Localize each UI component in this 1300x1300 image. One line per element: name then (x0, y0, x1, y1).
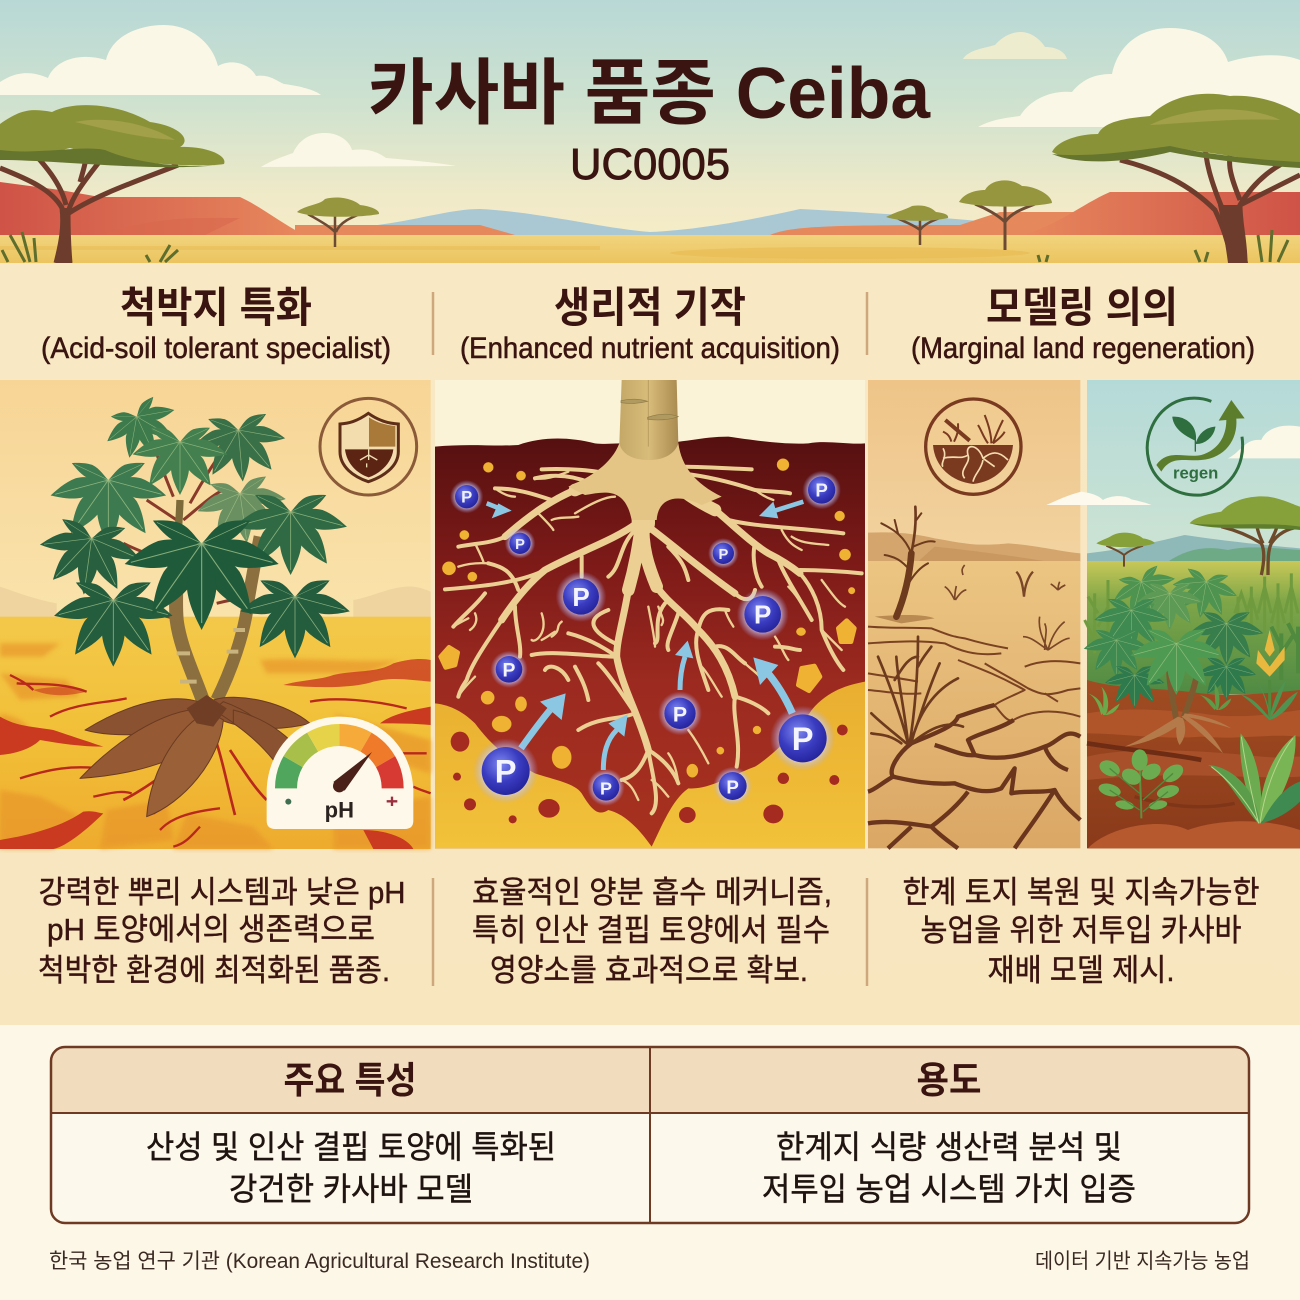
table cell: traits: 산성 및 인산 결핍 토양에 특화된 (146, 1129, 556, 1165)
phosphorus spheres: P (718, 547, 728, 563)
root flare (568, 443, 722, 520)
table: traits and uses (51, 1047, 1249, 1223)
hills (868, 532, 1080, 562)
leaves (32, 387, 352, 667)
trunk (619, 380, 678, 460)
table cell: traits (146, 1129, 556, 1207)
young plant: lower left (1097, 749, 1186, 818)
icon: shield (320, 398, 417, 495)
seedlings (1088, 683, 1231, 715)
title: 카사바 품종 Ceiba (368, 54, 931, 134)
phosphorus spheres (450, 471, 841, 806)
phosphorus spheres: P (673, 702, 687, 726)
table cell: uses: 한계지 식량 생산력 분석 및 (776, 1129, 1122, 1165)
panel: cassava plant on acid soil (0, 380, 431, 849)
text: column 1 description: 강력한 뿌리 시스템과 낮은 pH (38, 875, 406, 910)
hills: blue (370, 209, 990, 236)
phosphorus spheres: P (515, 537, 525, 553)
text: column 2 description: 특히 인산 결핍 토양에서 필수 (472, 913, 830, 948)
table cell: uses: 저투입 농업 시스템 가치 입증 (762, 1171, 1136, 1207)
tubers (80, 695, 310, 817)
acacia: left (0, 105, 224, 263)
acacia: small (1096, 533, 1155, 567)
table header: traits: 주요 특성 (284, 1060, 416, 1101)
heading: column 2: 생리적 기작 (554, 284, 746, 331)
heading: column 1: (Acid-soil tolerant specialist) (41, 332, 391, 365)
dead shrub: lower left (871, 637, 963, 743)
soil patches (0, 643, 431, 849)
soil body (435, 437, 865, 848)
phosphorus spheres: P (495, 753, 517, 790)
heading: column 3: (Marginal land regeneration) (911, 332, 1255, 365)
stems (176, 500, 260, 702)
icon: regen: regen (1173, 464, 1218, 483)
text: column 3 description: 재배 모델 제시. (988, 953, 1174, 988)
phosphorus spheres: P (754, 600, 771, 630)
phosphorus spheres: P (461, 488, 472, 507)
phosphorus spheres: P (726, 776, 739, 797)
clouds (1228, 426, 1300, 458)
text: column 3 description: 농업을 위한 저투입 카사바 (920, 913, 1242, 948)
subtitle: UC0005: UC0005 (570, 140, 730, 189)
text: column 2 description (472, 875, 832, 988)
cracks (868, 627, 1080, 721)
pebbles (441, 459, 855, 777)
phosphorus spheres: P (600, 778, 612, 798)
heading: column 2 (460, 284, 840, 365)
ground (0, 235, 1300, 263)
roots (445, 460, 862, 813)
mesa: right (770, 192, 1300, 235)
heading: column 1 (41, 284, 391, 365)
text: column 2 description: 효율적인 양분 흡수 메커니즘, (472, 875, 832, 910)
footer: institute: 한국 농업 연구 기관 (Korean Agricultural Research Institute) (49, 1250, 590, 1273)
acacia: small right 2 (959, 180, 1052, 250)
table cell: uses (762, 1129, 1136, 1207)
corn rows (1085, 573, 1298, 680)
footer: tagline: 데이터 기반 지속가능 농업 (1035, 1250, 1250, 1273)
table cell: traits: 강건한 카사바 모델 (229, 1171, 473, 1207)
gauge: pH: pH (325, 798, 354, 823)
phosphorus spheres: P (503, 661, 516, 682)
crop leaves (1082, 558, 1265, 708)
heading: column 3: 모델링 의의 (986, 284, 1178, 331)
text: column 1 description (38, 875, 406, 988)
gauge: pH (267, 717, 413, 829)
cloud: small left (261, 133, 456, 167)
dry grass tufts (945, 565, 1070, 650)
arrows (487, 502, 803, 770)
acacia: small left (297, 198, 379, 247)
yellow subsoil (435, 682, 865, 848)
acacia: big (1190, 496, 1300, 575)
acacia: right (1052, 94, 1300, 263)
icon: regen (1147, 398, 1245, 495)
cracks (10, 675, 431, 847)
grass tufts (2, 230, 1288, 262)
phosphorus spheres: P (815, 480, 828, 501)
yellow corn plant (1241, 630, 1298, 720)
field (1087, 561, 1300, 694)
text: column 1 description: pH 토양에서의 생존력으로 (47, 912, 375, 947)
icon: dry soil (926, 399, 1021, 494)
panel: roots absorbing phosphorus (435, 380, 865, 848)
text: column 3 description: 한계 토지 복원 및 지속가능한 (902, 875, 1260, 910)
heading: column 2: (Enhanced nutrient acquisition) (460, 332, 840, 365)
heading: column 1: 척박지 특화 (120, 284, 312, 331)
panel: degraded land (868, 380, 1080, 848)
phosphorus spheres: P (572, 582, 590, 612)
young plant: lower right (1208, 733, 1300, 823)
panel: savanna header scene (0, 0, 1300, 263)
red soil patches (0, 659, 431, 849)
heading: column 3 (911, 284, 1255, 365)
cloud: small right (963, 32, 1067, 59)
panel: regenerated land (1046, 380, 1300, 848)
table header: uses: 용도 (916, 1060, 982, 1101)
dead tree: upper left (875, 507, 935, 623)
cassava: central (1125, 625, 1231, 753)
phosphorus spheres: P (792, 720, 814, 757)
text: column 3 description (902, 875, 1260, 988)
text: column 1 description: 척박한 환경에 최적화된 품종. (38, 953, 390, 988)
text: column 2 description: 영양소를 효과적으로 확보. (490, 953, 808, 988)
cloud: large left (0, 25, 321, 95)
cloud: large right (978, 28, 1300, 127)
acacia: small right 1 (886, 205, 948, 245)
hills (1087, 535, 1300, 562)
soil (1087, 680, 1300, 848)
panel: beige band (0, 263, 1300, 1025)
mesa: left (0, 182, 515, 235)
branches (123, 433, 250, 620)
